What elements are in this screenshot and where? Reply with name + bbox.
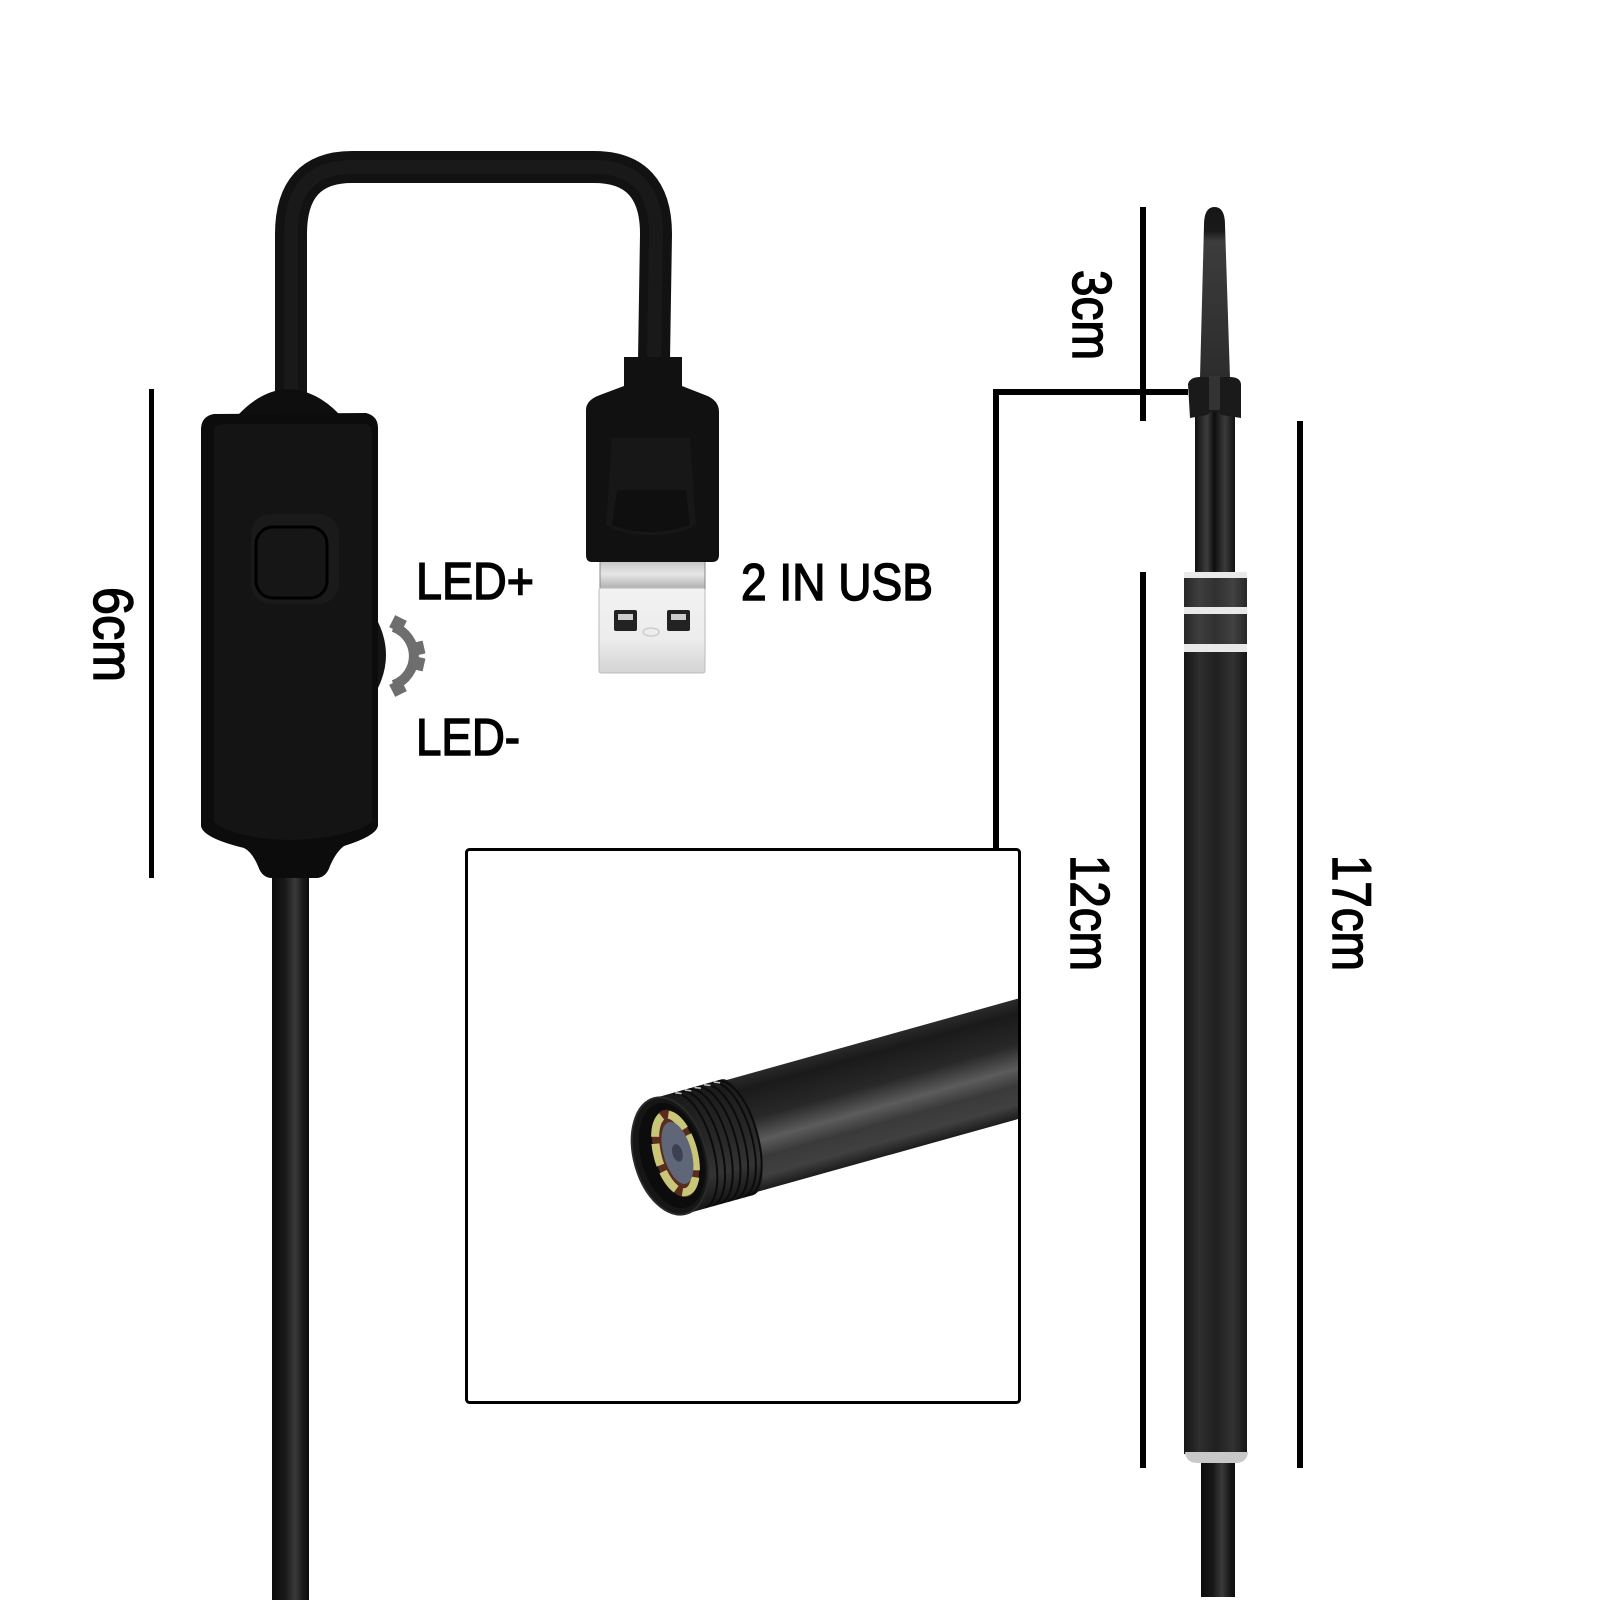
lower cable (272, 870, 309, 1600)
plastic housing (586, 357, 719, 562)
inline switch housing (201, 389, 386, 878)
leader line from inset to probe tip (996, 392, 1188, 849)
label: 12cm: 12cm (1059, 855, 1121, 971)
ear tip (1200, 207, 1230, 378)
label: 3cm: 3cm (1061, 270, 1123, 360)
LED ring (652, 1110, 700, 1198)
infographic: endoscope dimensions (92, 151, 1372, 1600)
probe close-up (630, 998, 1018, 1216)
label: LED+: LED+ (416, 553, 534, 611)
USB plug (586, 357, 719, 673)
label: LED-: LED- (416, 709, 520, 767)
silver rings (1184, 572, 1248, 1463)
end face (630, 1096, 709, 1216)
collar (1188, 376, 1241, 418)
threads (673, 1080, 763, 1208)
handle (1184, 572, 1247, 1454)
bottom cable (1201, 1460, 1235, 1597)
label: 6cm: 6cm (82, 587, 145, 682)
label: 17cm: 17cm (1321, 855, 1383, 971)
dimension line: 12cm (1140, 572, 1146, 1468)
label: 2 IN USB: 2 IN USB (741, 554, 933, 612)
icon: dimmer gear (394, 618, 424, 694)
inset: camera close-up (465, 848, 1021, 1404)
dimension line: 17cm (1297, 421, 1303, 1468)
endoscope probe side view (1184, 207, 1248, 1597)
dimension line: 3cm (1140, 207, 1146, 421)
dimension line: 6cm (149, 389, 154, 878)
dimmer wheel (378, 622, 386, 688)
USB cable loop (291, 167, 656, 395)
ringed section tint (1184, 578, 1247, 648)
push button (251, 514, 339, 604)
thin tube (1195, 400, 1235, 572)
metal connector (599, 558, 705, 673)
